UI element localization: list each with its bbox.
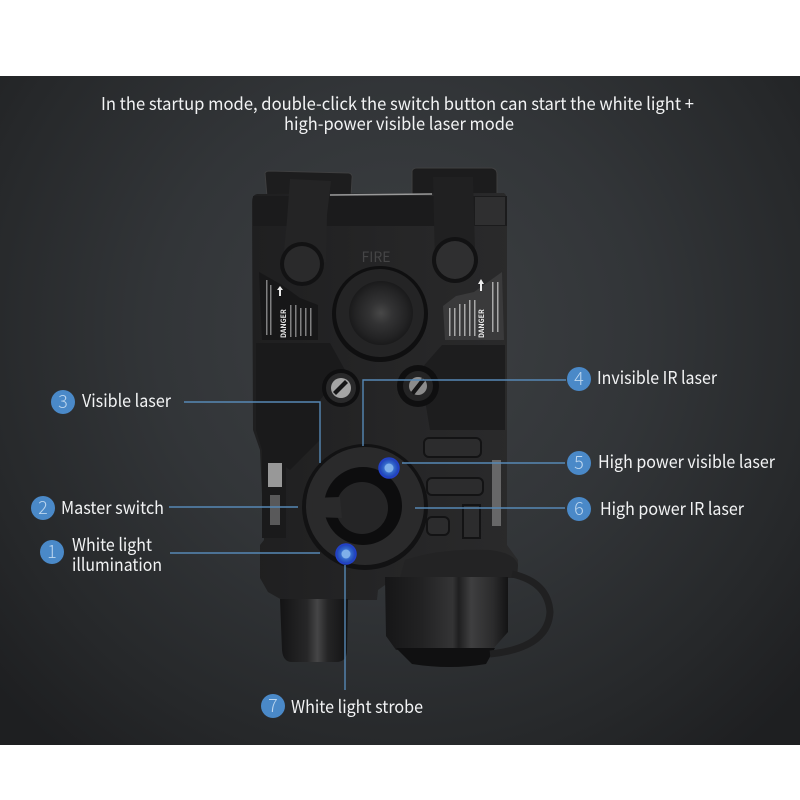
fire label: FIRE [362,247,390,267]
front collar [400,550,518,578]
right corner highlight [475,197,505,225]
blue screw: high power visible laser [379,458,399,478]
device: laser module [252,168,550,667]
top edge highlight [330,194,432,195]
label 1: white light illumination [40,532,162,577]
label 1: white light illumination: illumination [72,552,162,577]
left screw [322,369,360,407]
side switches [424,438,481,457]
title: high-power visible laser mode [284,111,514,136]
label 5: high power visible laser: 5 [574,449,584,475]
title: In the startup mode, double-click the switch button can start the white light + [101,91,694,116]
left strap knob [280,242,324,286]
label 3: visible laser: 3 [58,388,68,414]
leader lines [169,380,566,690]
right strap knob [432,237,478,283]
title [101,91,694,136]
label 4: invisible IR laser: 4 [574,365,584,391]
blue screw: white light strobe [336,544,356,564]
left top cap [265,171,352,197]
right screw [397,365,439,407]
left warning label: DANGER [279,309,289,338]
label 7: white light strobe: 7 [268,692,278,718]
left strap [283,179,331,262]
label 4: invisible IR laser: Invisible IR laser [597,365,717,390]
rotary dial [302,444,428,570]
right strap [433,177,478,262]
label 6: high power IR laser: High power IR laser [600,496,744,521]
label 1: white light illumination: 1 [47,538,57,564]
label 7: white light strobe: White light strobe [291,694,423,719]
left warning label [259,272,318,340]
left plug [280,599,348,662]
right lens barrel [385,577,508,667]
left data plate with code [262,450,286,538]
right warning label: DANGER [477,309,487,338]
label 2: master switch: 2 [38,494,48,520]
right side text strip [492,460,501,526]
main body [252,193,518,600]
top band [253,196,507,226]
label 2: master switch: Master switch [61,495,164,520]
right top cap [412,168,497,194]
label 5: high power visible laser: High power visible laser [598,449,775,474]
lower shoulder left [256,343,345,470]
label 3: visible laser: Visible laser [82,388,171,413]
lower shoulder right [420,345,505,430]
label 6: high power IR laser: 6 [574,495,584,521]
lanyard loop [490,574,550,654]
right warning label [443,272,504,340]
label 1: white light illumination: White light [72,532,152,557]
fire button [332,266,428,362]
label 3: visible laser [51,388,171,414]
